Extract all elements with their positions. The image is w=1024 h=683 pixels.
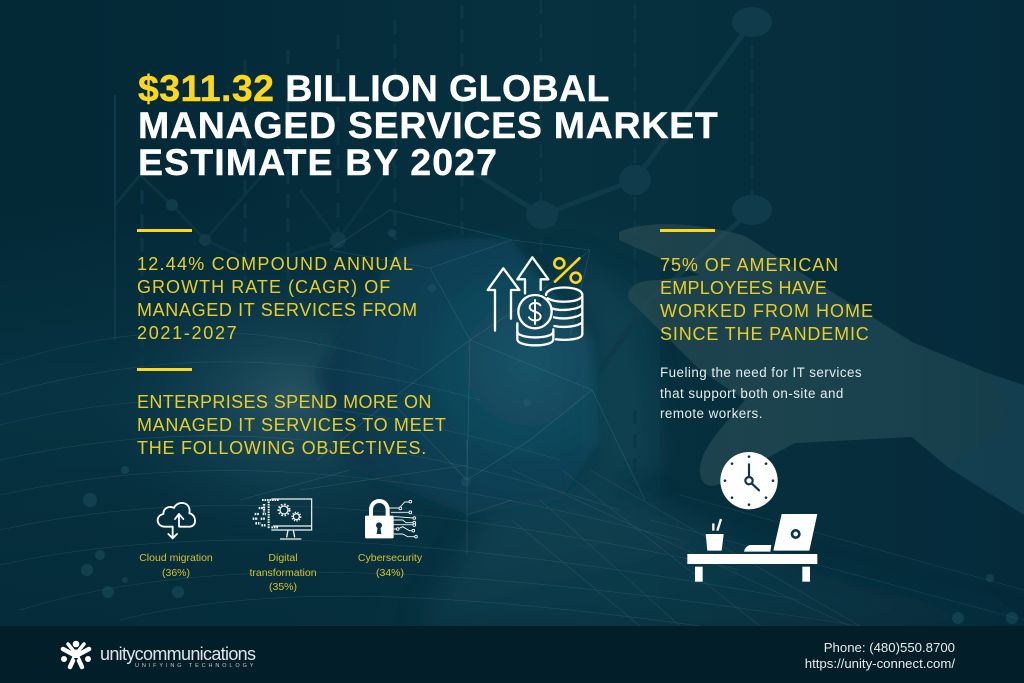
- icon: cloud migration: [156, 502, 196, 540]
- caption: cloud migration: Cloud migration: [139, 552, 213, 564]
- divider: objectives: [137, 368, 192, 371]
- logo mark: [60, 640, 92, 670]
- text: enterprise objectives: THE FOLLOWING OBJECTIVES.: [137, 438, 427, 458]
- divider: CAGR: [137, 229, 192, 232]
- text: enterprise objectives: [137, 392, 447, 458]
- text: enterprise objectives: MANAGED IT SERVICES TO MEET: [137, 415, 447, 435]
- footer bar: [0, 626, 1024, 683]
- title: $311.32 BILLION GLOBAL: [138, 67, 610, 109]
- text: remote work statistic: WORKED FROM HOME: [660, 301, 874, 321]
- text: remote work statistic: [660, 255, 874, 344]
- text: CAGR statistic: [137, 254, 418, 343]
- text: remote work statistic: SINCE THE PANDEMIC: [660, 324, 870, 344]
- text: remote work statistic: EMPLOYEES HAVE: [660, 278, 827, 298]
- logo: unity communications: [60, 640, 256, 670]
- text: remote work statistic: 75% OF AMERICAN: [660, 255, 839, 275]
- caption: cybersecurity: [358, 552, 422, 578]
- hand: [619, 224, 1008, 486]
- chart motif: [470, 22, 752, 370]
- caption: digital transformation: (35%): [269, 581, 297, 593]
- text: CAGR statistic: MANAGED IT SERVICES FROM: [137, 300, 418, 320]
- caption: digital transformation: transformation: [249, 566, 317, 578]
- icon: digital transformation: [252, 498, 312, 540]
- caption: cybersecurity: (34%): [376, 566, 404, 578]
- icon: growth arrows and coins: [486, 256, 584, 346]
- caption: cloud migration: [139, 552, 213, 578]
- caption: cloud migration: (36%): [162, 566, 190, 578]
- title: [138, 67, 719, 183]
- title: ESTIMATE BY 2027: [138, 141, 498, 183]
- contact details: [805, 640, 955, 670]
- text: CAGR statistic: GROWTH RATE (CAGR) OF: [137, 277, 391, 297]
- caption: digital transformation: Digital: [268, 552, 298, 564]
- contact details: https://unity-connect.com/: [805, 656, 955, 670]
- caption: cybersecurity: Cybersecurity: [358, 552, 422, 564]
- icon: cybersecurity lock: [365, 499, 418, 538]
- contact details: Phone: (480)550.8700: [824, 640, 955, 655]
- text: enterprise objectives: ENTERPRISES SPEND MORE ON: [137, 392, 432, 412]
- text: IT services note: remote workers.: [660, 406, 763, 421]
- mesh lines: [240, 210, 645, 555]
- title: MANAGED SERVICES MARKET: [138, 104, 719, 146]
- text: IT services note: [660, 365, 862, 421]
- icon: clock over desk with laptop: [687, 452, 818, 582]
- text: IT services note: Fueling the need for IT services: [660, 365, 862, 380]
- wave lines: [0, 332, 1024, 626]
- logo tagline: UNIFYING TECHNOLOGY: [135, 663, 256, 669]
- bokeh dots: [81, 229, 1018, 624]
- text: CAGR statistic: 2021-2027: [137, 323, 238, 343]
- caption: digital transformation: [249, 552, 317, 593]
- logo wordmark: unitycommunications: [100, 644, 255, 664]
- divider: remote work: [660, 229, 715, 232]
- text: CAGR statistic: 12.44% COMPOUND ANNUAL: [137, 254, 414, 274]
- text: IT services note: that support both on-site and: [660, 386, 844, 400]
